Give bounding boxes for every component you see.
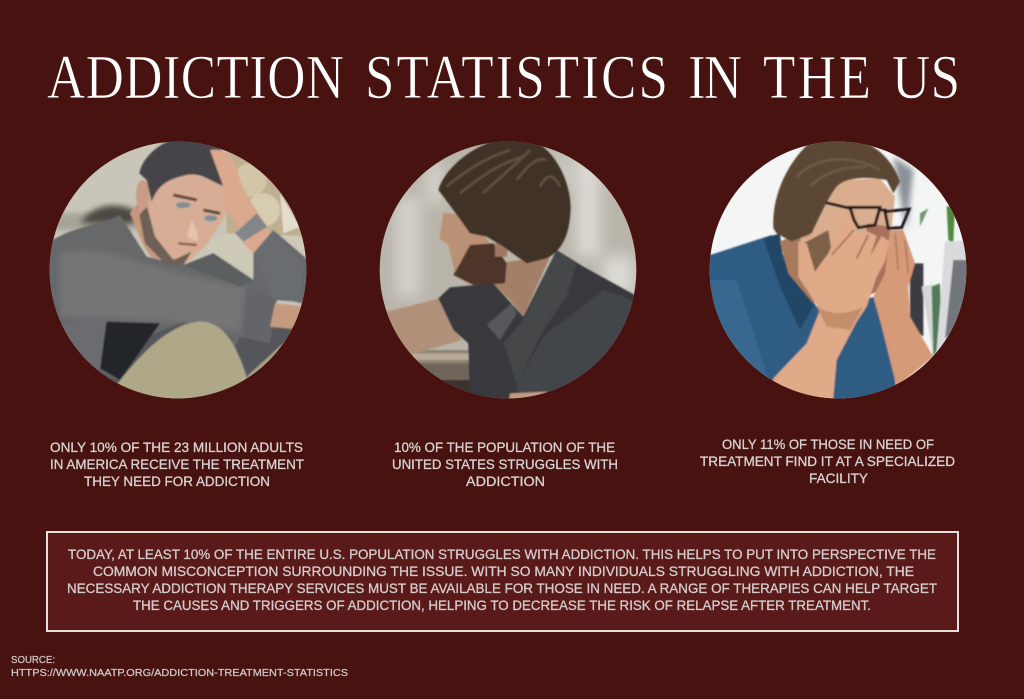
panel: summary paragraph: TODAY, AT LEAST 10% OF THE ENTIRE U.S. POPULATION STRUGGLES WITH ADDICTION. THIS HELPS TO PUT INTO PERSPECTIVE THE: [68, 547, 936, 562]
neck and face: [129, 204, 176, 260]
neck: [493, 257, 550, 317]
source citation: SOURCE:: [11, 654, 55, 666]
caption: first statistic: ONLY 10% OF THE 23 MILLION ADULTS: [50, 440, 303, 455]
title: US: [892, 42, 960, 112]
title: THE: [763, 42, 871, 112]
shirt: [438, 251, 634, 398]
caption: third statistic: ONLY 11% OF THOSE IN NEED OF: [722, 437, 934, 452]
arm: [380, 298, 462, 355]
shirt: [40, 215, 320, 380]
caption: third statistic: TREATMENT FIND IT AT A SPECIALIZED: [700, 454, 955, 469]
title: ADDICTION: [47, 42, 344, 112]
caption: second statistic: ADDICTION: [466, 474, 545, 489]
caption: first statistic: THEY NEED FOR ADDICTION: [84, 474, 270, 489]
panel: summary paragraph: THE CAUSES AND TRIGGERS OF ADDICTION, HELPING TO DECREASE THE RISK OF RELAPSE AFTER TREATMENT.: [133, 598, 871, 613]
base lower fill: [94, 320, 292, 384]
photo: bearded man looking away: [380, 142, 636, 398]
face: [800, 178, 895, 270]
face: [439, 213, 503, 283]
glasses: [826, 203, 909, 228]
photo: man sitting with hand on head: [50, 142, 306, 398]
dark under arm: [97, 322, 160, 380]
caption: second statistic: 10% OF THE POPULATION OF THE: [394, 440, 615, 455]
panel: summary paragraph: NECESSARY ADDICTION THERAPY SERVICES MUST BE AVAILABLE FOR THOSE IN NEED. A RANGE OF THERAPIES CAN HELP TARGET: [67, 581, 937, 596]
caption: second statistic: UNITED STATES STRUGGLES WITH: [392, 457, 618, 472]
hair: [138, 142, 224, 202]
source citation: HTTPS://WWW.NAATP.ORG/ADDICTION-TREATMENT-STATISTICS: [11, 667, 348, 679]
office background: [893, 157, 913, 230]
window sill: [416, 349, 470, 364]
forearm: [270, 303, 307, 330]
hair: [773, 136, 900, 242]
neck: [780, 230, 833, 303]
panel: summary paragraph: COMMON MISCONCEPTION SURROUNDING THE ISSUE. WITH SO MANY INDIVIDUALS STRUGGLING WITH ADDICTION, THE: [93, 564, 914, 579]
title: STATISTICS: [365, 42, 668, 112]
front hand and arm: [772, 231, 890, 398]
title: IN: [688, 42, 742, 112]
caption: first statistic: [50, 440, 304, 489]
title: [47, 42, 960, 112]
beard: [453, 243, 507, 285]
photo: man rubbing eyes under glasses: [710, 142, 966, 398]
caption: second statistic: [392, 440, 618, 489]
panel: summary paragraph: [47, 532, 958, 631]
pants: [117, 320, 248, 398]
hair: [438, 137, 571, 263]
hand and arm: [210, 149, 270, 253]
back hand and arm: [873, 230, 933, 387]
shirt: [700, 235, 900, 423]
ear: [790, 220, 810, 238]
caption: first statistic: IN AMERICA RECEIVE THE TREATMENT: [50, 457, 304, 472]
source citation: [11, 654, 348, 679]
caption: third statistic: [700, 437, 955, 486]
caption: third statistic: FACILITY: [809, 471, 868, 486]
